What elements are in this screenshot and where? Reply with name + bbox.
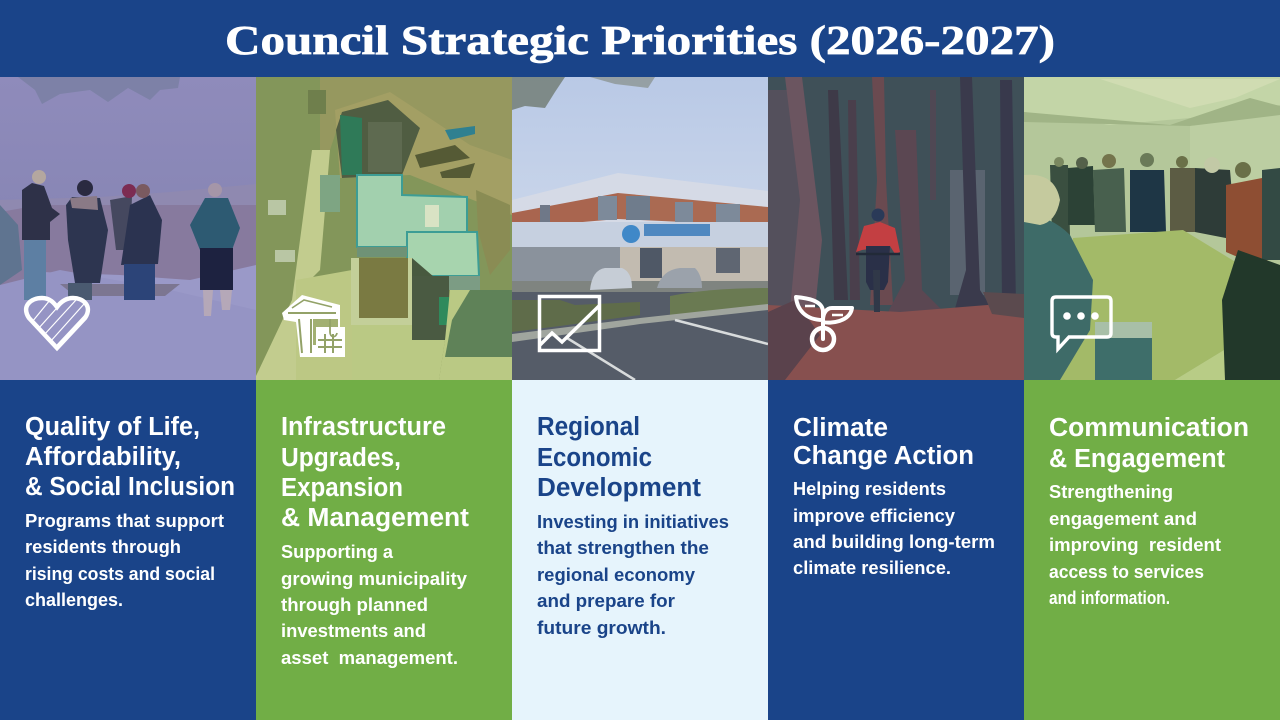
text: infrastructure description: asset management.	[281, 647, 458, 668]
panel: regional economic development	[512, 77, 768, 720]
icon: sprout	[796, 297, 852, 350]
text: quality of life description: Programs that support	[25, 510, 224, 531]
panel: communication and engagement	[1024, 77, 1280, 720]
heading: climate change action	[793, 414, 974, 470]
text: quality of life description: challenges.	[25, 589, 123, 610]
heading: regional economic development: Economic	[537, 444, 652, 472]
panel: climate change action	[768, 77, 1024, 574]
text: infrastructure description: growing municipality	[281, 568, 468, 589]
text: communication description: improving resident	[1049, 534, 1221, 555]
text: climate description: and building long-term	[793, 531, 995, 552]
text: regional economic description	[537, 511, 729, 638]
heading: quality of life	[25, 413, 235, 501]
title: Council Strategic Priorities (2026-2027)	[225, 17, 1055, 63]
text: quality of life description: residents through	[25, 536, 181, 557]
text: climate description: Helping residents	[793, 478, 946, 499]
heading: communication and engagement: & Engagement	[1049, 445, 1225, 473]
photo: cyclist in forest	[768, 77, 1024, 380]
heading: quality of life: Affordability,	[25, 443, 181, 471]
text: climate description: climate resilience.	[793, 557, 951, 578]
heading: regional economic development	[537, 413, 702, 502]
photo: people in snow	[0, 77, 256, 380]
text: infrastructure description: Supporting a	[281, 541, 394, 562]
text: climate description: improve efficiency	[793, 505, 956, 526]
text: communication description: engagement and	[1049, 508, 1197, 529]
panel: infrastructure	[256, 77, 512, 720]
text: regional economic description: regional economy	[537, 564, 696, 585]
text: regional economic description: Investing in initiatives	[537, 511, 729, 532]
header band	[0, 0, 1280, 77]
heading: communication and engagement: Communication	[1049, 414, 1249, 442]
heading: quality of life: & Social Inclusion	[25, 473, 235, 501]
text: quality of life description: rising costs and social	[25, 563, 215, 584]
panel: quality of life	[0, 77, 256, 610]
text: quality of life description	[25, 510, 224, 610]
heading: climate change action: Climate	[793, 414, 888, 442]
heading: climate change action: Change Action	[793, 442, 974, 470]
text: communication description: Strengthening	[1049, 481, 1173, 502]
text: communication description: and information.	[1049, 587, 1170, 608]
photo: clinic building rendering	[512, 77, 768, 380]
text: climate description	[793, 478, 995, 578]
photo: community workshop around map table	[1024, 77, 1280, 380]
text: infrastructure description	[281, 541, 468, 668]
heading: infrastructure: Upgrades,	[281, 444, 401, 472]
photo: aerial construction site	[256, 77, 512, 380]
icon: speech bubble	[1052, 297, 1111, 349]
icon: construction crane	[282, 295, 345, 357]
text: regional economic description: and prepare for	[537, 590, 675, 611]
icon: growth chart	[540, 296, 600, 350]
icon: heart	[26, 298, 88, 348]
heading: communication and engagement	[1049, 414, 1249, 473]
text: infrastructure description: through planned	[281, 594, 428, 615]
heading: infrastructure	[281, 413, 470, 532]
text: communication description	[1049, 481, 1221, 608]
text: regional economic description: that strengthen the	[537, 537, 709, 558]
text: communication description: access to services	[1049, 561, 1204, 582]
text: regional economic description: future growth.	[537, 617, 666, 638]
text: infrastructure description: investments and	[281, 620, 426, 641]
heading: infrastructure: Expansion	[281, 474, 403, 502]
heading: infrastructure: Infrastructure	[281, 413, 446, 441]
heading: quality of life: Quality of Life,	[25, 413, 200, 441]
heading: infrastructure: & Management	[281, 504, 470, 532]
heading: regional economic development: Development	[537, 474, 702, 502]
heading: regional economic development: Regional	[537, 413, 640, 441]
